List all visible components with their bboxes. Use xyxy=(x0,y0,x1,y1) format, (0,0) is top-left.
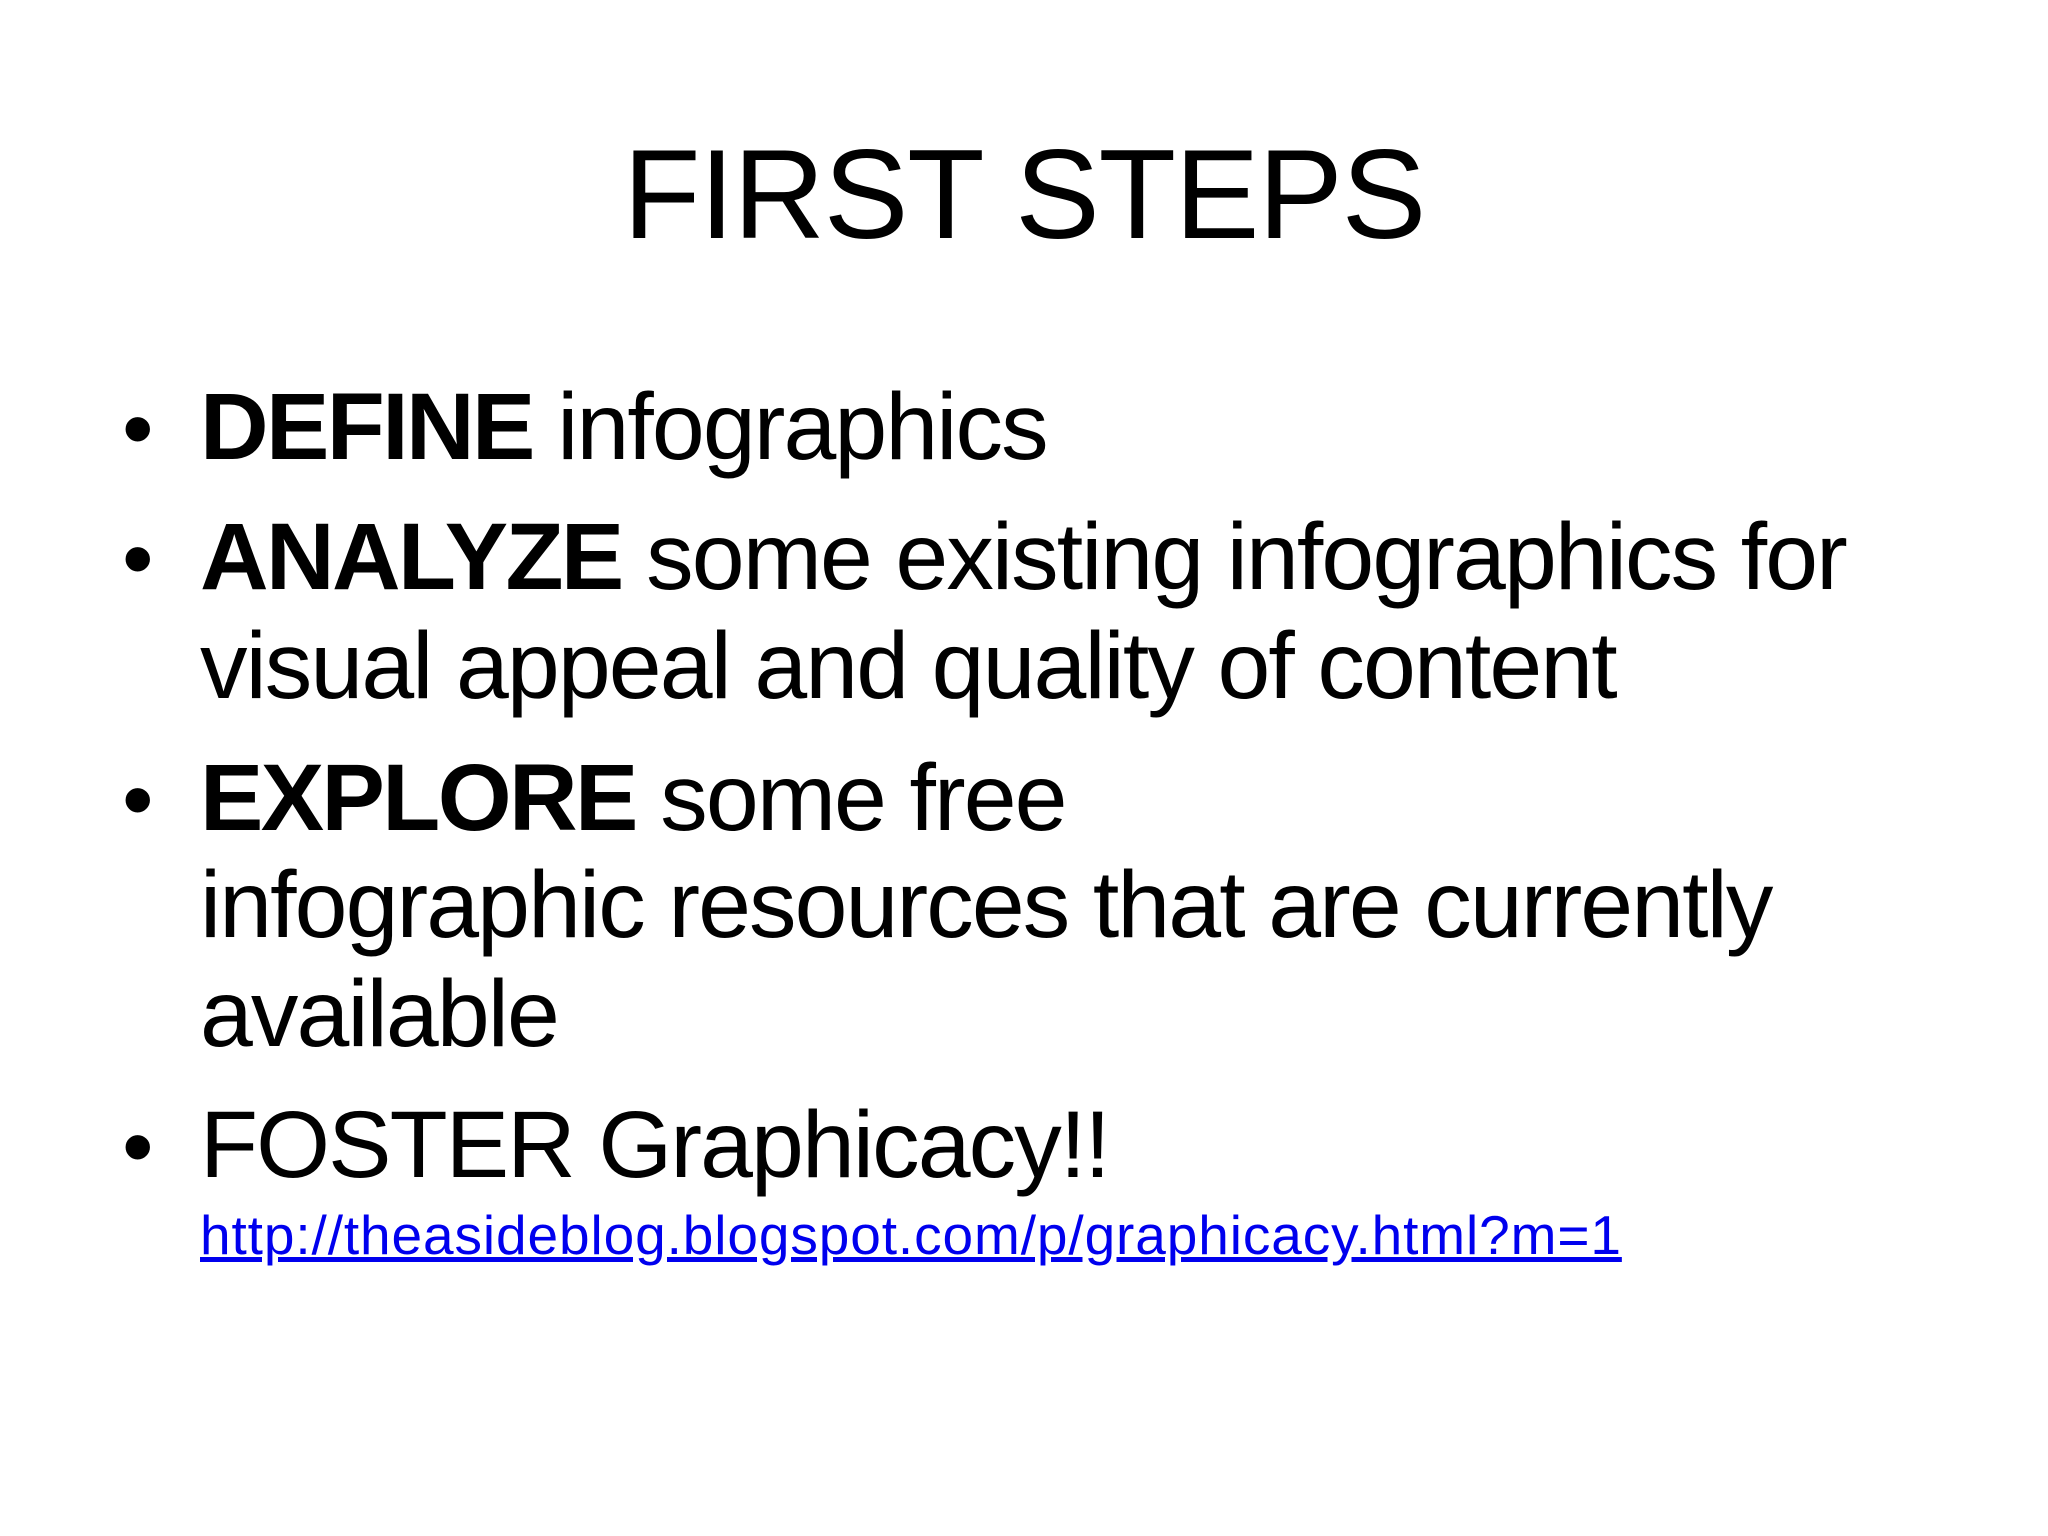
bullet: foster xyxy=(122,1092,1622,1266)
bullet: explore: infographic resources that are currently xyxy=(200,852,1771,958)
bullet: explore: • xyxy=(122,750,154,850)
link: http://theasideblog.blogspot.com/p/graphicacy.html?m=1 xyxy=(200,1204,1622,1266)
bullet: analyze: • xyxy=(122,509,154,609)
bullet: explore: available xyxy=(200,961,558,1067)
title: FIRST STEPS xyxy=(623,123,1425,265)
bullet: define: • xyxy=(122,379,154,479)
bullet: explore xyxy=(122,745,1774,1067)
bullet list xyxy=(122,374,1846,1266)
bullet: analyze: ANALYZE some existing infographics for xyxy=(200,504,1846,610)
bullet: define: DEFINE infographics xyxy=(200,374,1047,480)
bullet: analyze: visual appeal and quality of content xyxy=(200,613,1616,719)
bullet: foster: • xyxy=(122,1097,154,1197)
bullet: analyze xyxy=(122,504,1846,719)
bullet: foster: FOSTER Graphicacy!! xyxy=(200,1092,1109,1198)
bullet: explore: EXPLORE some free xyxy=(200,745,1066,851)
